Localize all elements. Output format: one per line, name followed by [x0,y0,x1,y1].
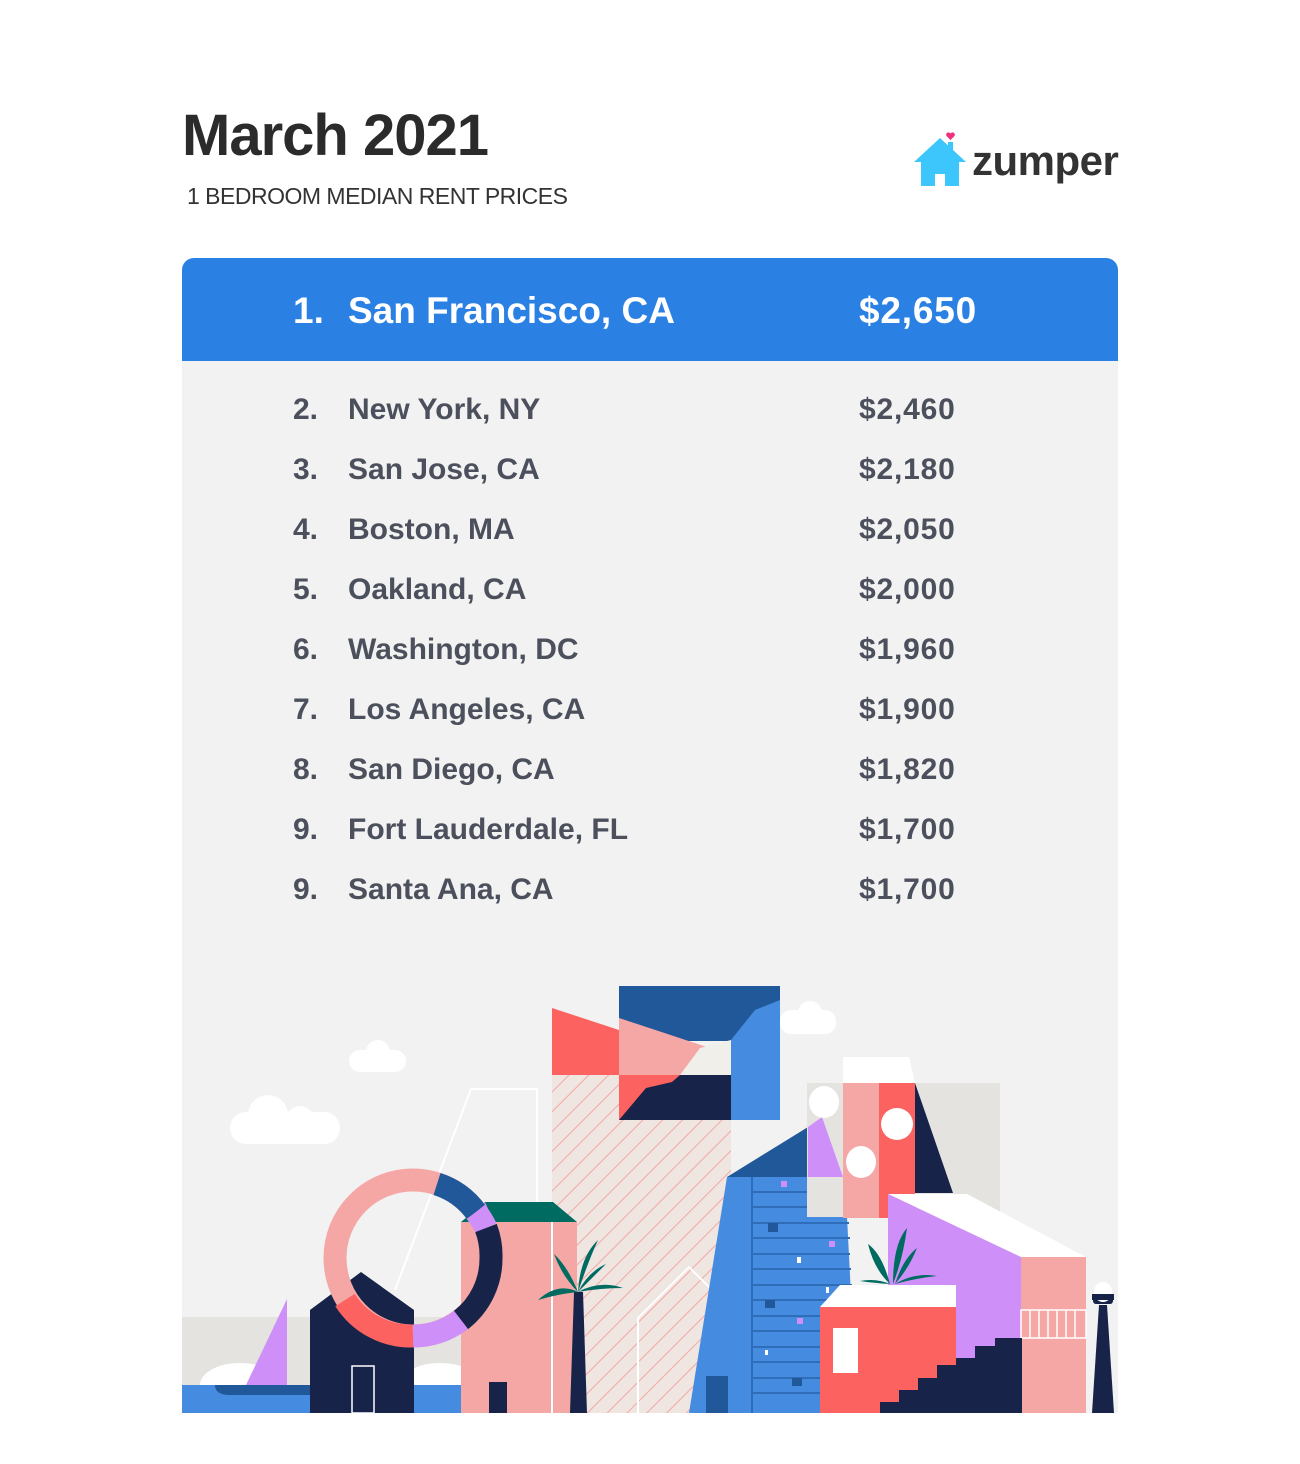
row 8: 8. [293,753,318,786]
row 6: Washington, DC [348,633,579,666]
row 6 [293,633,956,666]
logo: zumper: zumper [972,137,1118,184]
row 10: 9. [293,873,318,906]
boat [215,1299,310,1395]
row 8: San Diego, CA [348,753,555,786]
icon: house [914,132,966,186]
tall column building [807,1057,1000,1218]
red building [820,1285,956,1413]
row 9: 9. [293,813,318,846]
row 10: Santa Ana, CA [348,873,554,906]
row 3: San Jose, CA [348,453,540,486]
row 4: 4. [293,513,318,546]
row 2: $2,460 [859,393,956,426]
row 9: Fort Lauderdale, FL [348,813,628,846]
row 4: Boston, MA [348,513,515,546]
row 7: Los Angeles, CA [348,693,585,726]
row 10: $1,700 [859,873,956,906]
logo: zumper [914,132,1118,186]
header row: #1: 1. [293,290,324,331]
ground and water [182,1317,480,1413]
blue tower [689,1127,857,1413]
row 2: 2. [293,393,318,426]
row 2 [293,393,956,426]
white outline house [637,1266,710,1413]
title: March 2021 [182,103,488,168]
row 8: $1,820 [859,753,956,786]
row 2: New York, NY [348,393,540,426]
purple building [880,1194,1086,1413]
hatched tower [552,986,780,1413]
subtitle: 1 BEDROOM MEDIAN RENT PRICES [187,183,567,209]
header row: #1 [182,258,1118,361]
row 5: $2,000 [859,573,956,606]
ring [335,1180,491,1336]
row 7: 7. [293,693,318,726]
row 9 [293,813,956,846]
row 8 [293,753,956,786]
header row: #1: San Francisco, CA [348,290,675,331]
stairs [956,1338,1022,1413]
header row: #1: $2,650 [859,290,977,331]
row 5: Oakland, CA [348,573,526,606]
row 7 [293,693,956,726]
palm tree 1 [538,1240,623,1413]
row 3 [293,453,956,486]
row 4: $2,050 [859,513,956,546]
row 5: 5. [293,573,318,606]
clouds [230,1001,836,1144]
row 5 [293,573,956,606]
illustration: city skyline [182,986,1114,1413]
row 6: $1,960 [859,633,956,666]
white outline building [394,1088,538,1290]
row 10 [293,873,956,906]
row 3: $2,180 [859,453,956,486]
row 6: 6. [293,633,318,666]
palm plant [860,1228,937,1284]
row 3: 3. [293,453,318,486]
panel: ranking table [182,258,1118,1413]
row 4 [293,513,956,546]
row 7: $1,900 [859,693,956,726]
navy house [310,1272,414,1413]
row 9: $1,700 [859,813,956,846]
lamp post [1092,1282,1114,1413]
pink building [461,1202,577,1413]
